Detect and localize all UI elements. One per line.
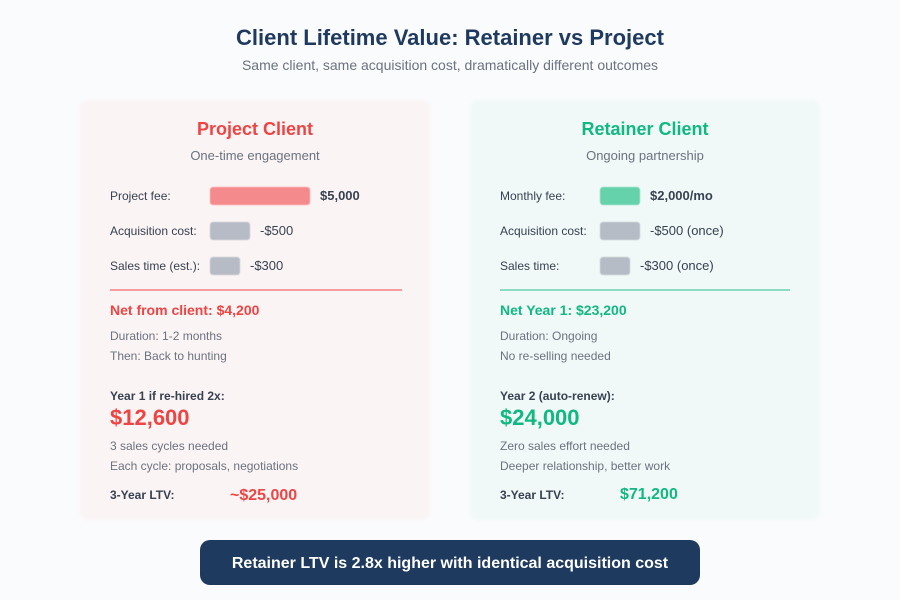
row: acquisition cost [110, 222, 293, 240]
project duration notes: Duration: 1-2 months [110, 329, 222, 343]
project heading: Project Client [197, 119, 313, 139]
project year 1 label: Year 1 if re-hired 2x: [110, 389, 225, 403]
retainer duration notes: Duration: Ongoing [500, 329, 597, 343]
project sales notes [110, 439, 298, 473]
row: monthly fee: Monthly fee: [500, 189, 565, 203]
project year 1 value: $12,600 [110, 405, 190, 430]
project 3-year LTV [110, 487, 297, 504]
project divider [110, 289, 402, 291]
project duration notes [110, 329, 227, 363]
retainer subheading: Ongoing partnership [586, 148, 704, 163]
retainer year 2 label: Year 2 (auto-renew): [500, 389, 615, 403]
project 3-year LTV: ~$25,000 [230, 487, 297, 504]
project subheading: One-time engagement [190, 148, 320, 163]
subtitle: Same client, same acquisition cost, dramatically different outcomes [242, 57, 658, 73]
row: monthly fee: $2,000/mo [650, 188, 713, 203]
project duration notes: Then: Back to hunting [110, 349, 227, 363]
title: Client Lifetime Value: Retainer vs Project [236, 25, 665, 50]
row: acquisition cost: -$500 [260, 223, 293, 238]
project sales notes: Each cycle: proposals, negotiations [110, 459, 298, 473]
callout [200, 540, 700, 585]
retainer divider [500, 289, 790, 291]
retainer sales notes: Zero sales effort needed [500, 439, 630, 453]
row: sales time [110, 257, 283, 275]
retainer year 2 value: $24,000 [500, 405, 580, 430]
row: acquisition cost: Acquisition cost: [110, 224, 197, 238]
retainer 3-year LTV: 3-Year LTV: [500, 488, 564, 502]
project net: Net from client: $4,200 [110, 302, 260, 318]
panel: project client [80, 100, 430, 520]
row: acquisition cost [500, 222, 724, 240]
row: project fee: $5,000 [320, 188, 360, 203]
project 3-year LTV: 3-Year LTV: [110, 488, 174, 502]
row: acquisition cost: Acquisition cost: [500, 224, 587, 238]
retainer 3-year LTV [500, 486, 678, 503]
row: sales time: Sales time: [500, 259, 559, 273]
retainer sales notes [500, 439, 671, 473]
project sales notes: 3 sales cycles needed [110, 439, 228, 453]
row: sales time: -$300 (once) [640, 258, 714, 273]
retainer heading: Retainer Client [581, 119, 709, 139]
row: monthly fee [500, 187, 713, 205]
row: project fee: Project fee: [110, 189, 171, 203]
row: sales time [500, 257, 714, 275]
callout: Retainer LTV is 2.8x higher with identical acquisition cost [232, 555, 669, 572]
retainer 3-year LTV: $71,200 [620, 486, 678, 503]
row: sales time: Sales time (est.): [110, 259, 200, 273]
row: project fee [110, 187, 360, 205]
retainer net: Net Year 1: $23,200 [500, 302, 627, 318]
panel: retainer client [470, 100, 820, 520]
retainer sales notes: Deeper relationship, better work [500, 459, 671, 473]
retainer duration notes [500, 329, 611, 363]
row: acquisition cost: -$500 (once) [650, 223, 724, 238]
retainer duration notes: No re-selling needed [500, 349, 611, 363]
row: sales time: -$300 [250, 258, 283, 273]
